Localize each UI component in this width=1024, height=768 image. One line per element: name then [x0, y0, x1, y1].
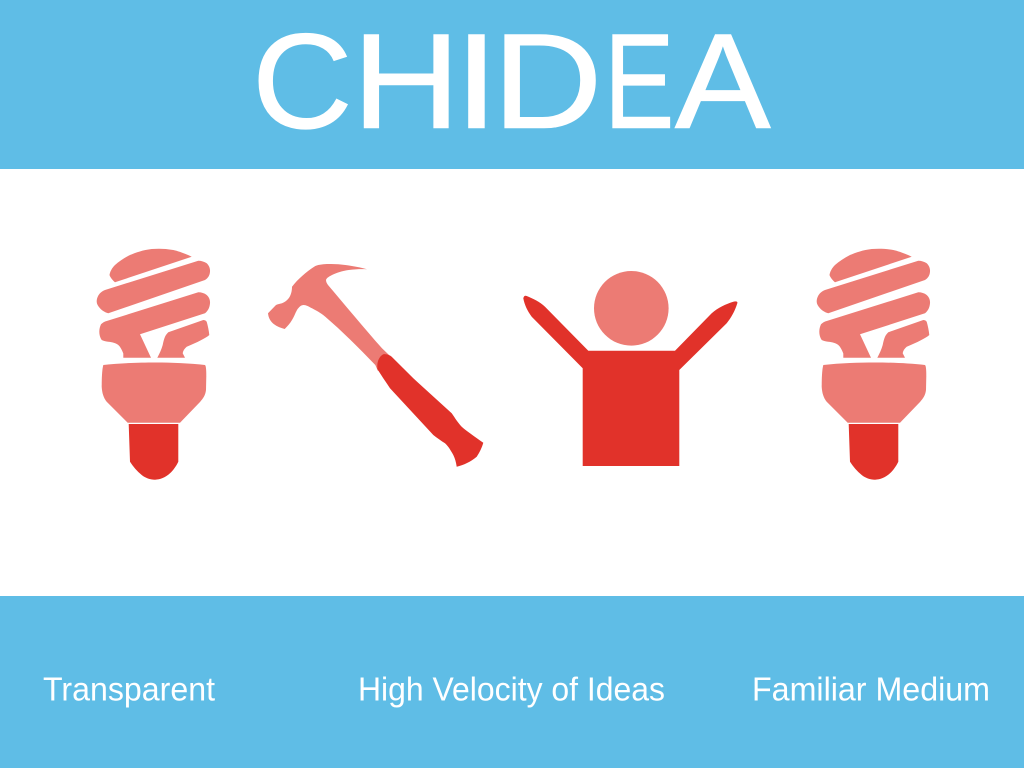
person: body and arms [523, 296, 737, 466]
label: Familiar Medium: Familiar Medium [752, 671, 990, 708]
title: C [252, 6, 352, 157]
top banner [0, 0, 1024, 169]
title: E [604, 6, 674, 157]
icon: light bulb left [97, 249, 210, 480]
bottom banner [0, 596, 1024, 768]
title: I [454, 6, 499, 157]
icon: person with raised arms [523, 271, 737, 466]
title: H [352, 6, 460, 157]
title: A [675, 6, 770, 157]
person: head [594, 271, 669, 346]
title: D [493, 6, 602, 157]
icon: light bulb right [817, 249, 930, 480]
label: High Velocity of Ideas: High Velocity of Ideas [358, 671, 665, 708]
icon: hammer [268, 264, 483, 467]
label: Transparent: Transparent [43, 671, 215, 708]
